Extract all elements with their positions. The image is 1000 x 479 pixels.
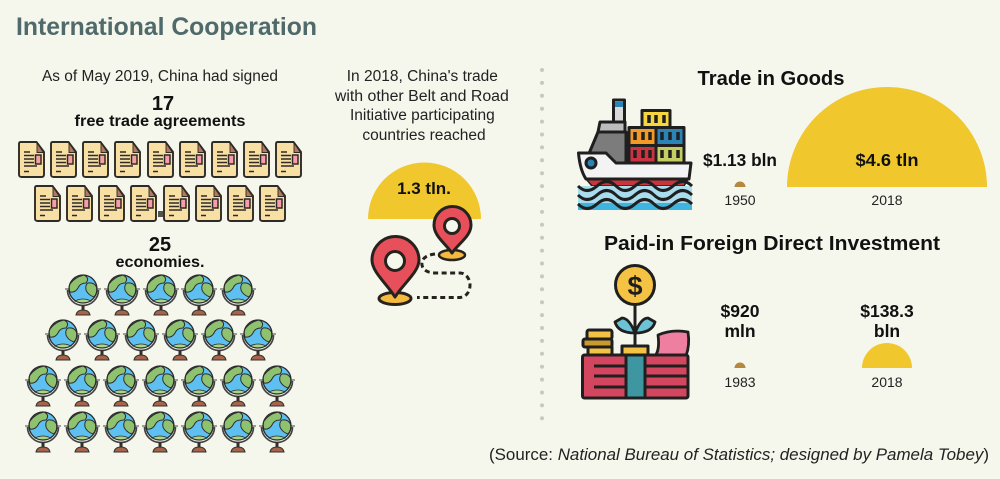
icon row: documents [19,142,301,221]
text: Belt and Road intro: Initiative participating [350,107,495,124]
dotted divider [540,70,544,428]
label: 1983: 1983 [724,374,756,390]
text: Belt and Road intro: with other Belt and Road [334,88,509,105]
value: 1.13 bln: $1.13 bln [703,150,777,170]
panel: Belt and Road trade [334,68,513,304]
icon rows: globes [25,275,295,452]
label: 1950: 1950 [724,192,756,208]
heading: trade in goods: Trade in Goods [698,67,844,90]
text: Belt and Road intro: countries reached [362,127,486,144]
panel: trade in goods [578,67,987,210]
source note: (Source: National Bureau of Statistics; designed by Pamela Tobey) [489,445,989,464]
panel: paid-in FDI [582,232,940,398]
label: 2018 FDI: 2018 [871,374,903,390]
stat: 25: 25 [149,234,171,256]
value: 138.3 bln: bln [874,321,900,341]
panel: free trade agreements [19,68,301,221]
icon: cargo ship [578,100,692,210]
chart: semicircle 2018 [787,87,987,187]
value: 1.3 tln: 1.3 tln. [397,179,451,198]
chart: semicircle 1950 [734,182,746,187]
label: free trade agreements: free trade agreements [74,113,246,130]
icon: money plant [582,266,689,398]
value: 920 mln: $920 [721,301,760,321]
text: as of May 2019: As of May 2019, China had signed [42,68,278,85]
text: Belt and Road intro: In 2018, China's trade [347,68,498,85]
label: economies: economies. [116,254,204,271]
chart: semicircle 2018 FDI [862,343,912,368]
value: 920 mln: mln [724,321,756,341]
icon: money plant: $ [627,271,643,301]
value: 138.3 bln: $138.3 [860,301,914,321]
chart: semicircle 1983 [734,363,746,368]
chart: semicircle 1.3 tln [368,162,481,219]
heading: paid-in FDI: Paid-in Foreign Direct Investment [604,232,940,255]
stray mark behind documents [158,211,163,217]
label: 2018: 2018 [871,192,903,208]
icon: map pins and route [372,207,471,304]
panel: economies [25,234,295,452]
title: International Cooperation [16,13,317,41]
stat: 17: 17 [152,93,174,115]
value: 4.6 tln: $4.6 tln [856,150,918,170]
